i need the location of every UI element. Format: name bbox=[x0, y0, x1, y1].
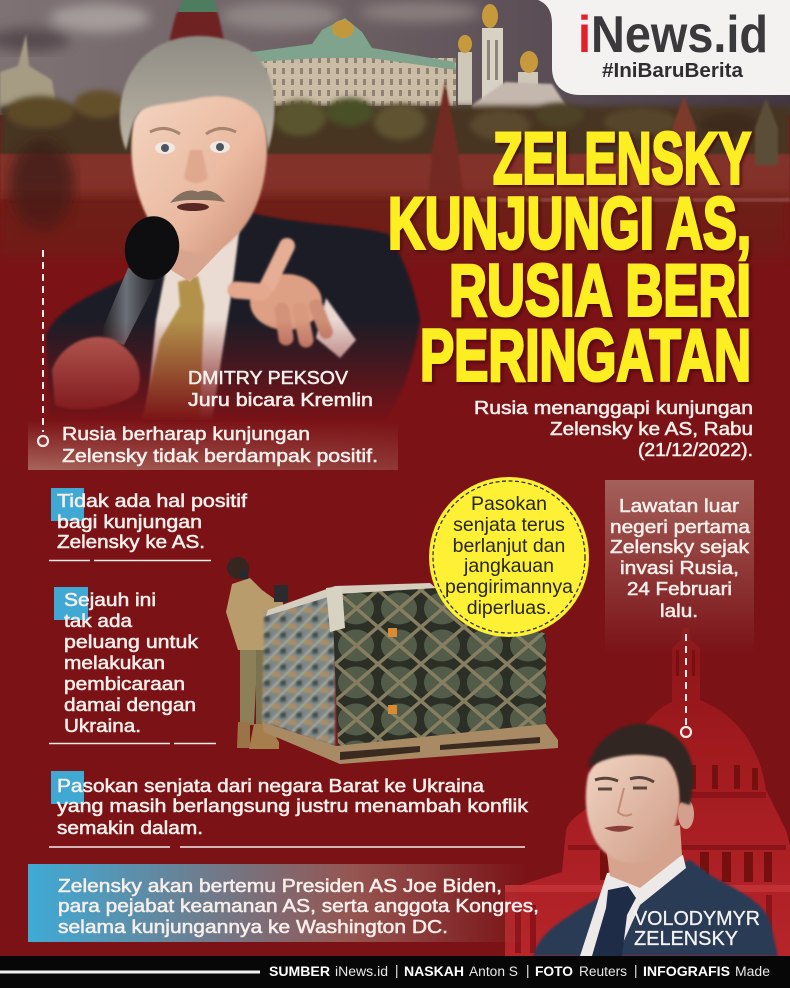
photo: Dmitry Peskov bbox=[30, 36, 430, 422]
panel: meeting info: para pejabat keamanan AS, serta anggota Kongres, bbox=[58, 895, 539, 916]
pointing hand bbox=[236, 246, 356, 358]
footer credits bbox=[0, 956, 790, 988]
tie bbox=[592, 886, 636, 956]
eyes and brows bbox=[595, 778, 654, 782]
footer credits: SUMBER bbox=[269, 964, 330, 979]
panel: Lawatan: lalu. bbox=[660, 600, 698, 621]
background photo: Kremlin bbox=[0, 0, 790, 300]
subtitle text: Rusia menanggapi kunjungan bbox=[474, 397, 753, 418]
shirt and collar bbox=[580, 855, 686, 956]
shirt bbox=[146, 225, 240, 420]
subtitle text bbox=[474, 397, 753, 460]
statement 2: pembicaraan bbox=[64, 673, 185, 694]
panel: Lawatan bbox=[605, 480, 754, 655]
dashed connector left bbox=[38, 250, 48, 446]
statement 2: Ukraina. bbox=[64, 715, 141, 736]
panel: Lawatan: Zelensky sejak bbox=[610, 536, 750, 557]
callout: yellow circle: senjata terus bbox=[453, 514, 565, 536]
panel: Rusia berharap: Rusia berharap kunjungan bbox=[62, 423, 310, 444]
name label: VOLODYMYR bbox=[634, 908, 760, 930]
bottom fade bbox=[30, 320, 430, 422]
soldier bbox=[226, 557, 288, 749]
footer credits: NASKAH bbox=[404, 964, 464, 979]
statement 2: Sejauh ini bbox=[64, 589, 156, 610]
subtitle text: Zelensky ke AS, Rabu bbox=[550, 418, 753, 439]
logo panel bbox=[538, 0, 790, 95]
mustache and mouth bbox=[170, 190, 225, 203]
footer credits: INFOGRAFIS bbox=[643, 964, 730, 979]
hair bbox=[120, 36, 275, 150]
grand palace bbox=[252, 58, 456, 106]
footer credits: Reuters bbox=[579, 964, 627, 979]
footer credits: | bbox=[634, 963, 638, 978]
photo: Volodymyr Zelensky bbox=[533, 724, 778, 956]
left palace bbox=[0, 34, 56, 108]
callout: yellow circle bbox=[429, 477, 589, 637]
title bbox=[388, 118, 751, 396]
footer credits: Made bbox=[735, 964, 770, 979]
neck bbox=[605, 825, 682, 888]
footer credits: | bbox=[395, 963, 399, 978]
orange labels bbox=[388, 628, 397, 637]
statement 2 bbox=[49, 587, 216, 744]
tower behind head bbox=[170, 0, 224, 60]
footer credits: FOTO bbox=[535, 964, 573, 979]
suit bbox=[46, 213, 420, 420]
photo: soldier and weapons pallet bbox=[226, 557, 558, 764]
footer credits: Anton S bbox=[469, 964, 518, 979]
callout: yellow circle: berlanjut dan bbox=[453, 535, 565, 557]
face bbox=[586, 747, 680, 863]
statement 2: peluang untuk bbox=[64, 631, 199, 652]
microphone head bbox=[119, 211, 185, 285]
panel: meeting info bbox=[28, 864, 539, 942]
holding hand bbox=[52, 337, 140, 409]
footer credits: | bbox=[526, 963, 530, 978]
nose shadow bbox=[618, 788, 632, 816]
statement 3: yang masih berlangsung justru menambah konflik bbox=[57, 795, 529, 816]
panel: Rusia berharap: Zelensky tidak berdampak positif. bbox=[62, 445, 378, 466]
hair bbox=[588, 724, 693, 805]
statement 2: melakukan bbox=[64, 652, 165, 673]
tie bbox=[142, 276, 204, 420]
ear bbox=[678, 799, 694, 829]
statement 3: semakin dalam. bbox=[57, 817, 203, 838]
dashed connector right bbox=[681, 634, 691, 737]
wooden base bbox=[262, 722, 558, 764]
pallet right face bbox=[332, 586, 546, 746]
callout: yellow circle: diperluas. bbox=[467, 597, 551, 619]
statement 1: Tidak ada hal positif bbox=[57, 490, 248, 511]
tree band bbox=[0, 106, 790, 166]
microphone handle bbox=[100, 268, 158, 345]
statement 2: damai dengan bbox=[64, 694, 196, 715]
statement 2: tak ada bbox=[64, 610, 133, 631]
pallet left face bbox=[262, 592, 335, 747]
name label: Peskov: DMITRY PEKSOV bbox=[188, 367, 349, 388]
neck and face bbox=[165, 232, 238, 282]
name label: Peskov: Juru bicara Kremlin bbox=[188, 389, 373, 410]
red wall and river bbox=[0, 154, 790, 200]
panel: Lawatan: Lawatan luar bbox=[619, 495, 739, 516]
panel: meeting info: selama kunjungannya ke Washington DC. bbox=[58, 916, 448, 937]
red fade bbox=[0, 175, 790, 300]
name label: ZELENSKY bbox=[634, 928, 738, 950]
panel: Lawatan: negeri pertama bbox=[610, 516, 751, 537]
panel: Rusia berharap bbox=[28, 420, 398, 470]
statement 3: Pasokan senjata dari negara Barat ke Ukraina bbox=[57, 775, 485, 796]
statement 1 bbox=[49, 488, 248, 560]
name label bbox=[634, 908, 760, 950]
mouth bbox=[604, 826, 634, 832]
pallet top wrap bbox=[266, 583, 436, 616]
subtitle text: (21/12/2022). bbox=[638, 439, 753, 460]
statement 3 bbox=[49, 771, 529, 847]
bell tower bbox=[482, 28, 503, 105]
eyes bbox=[155, 142, 175, 154]
statement 1: bagi kunjungan bbox=[57, 511, 202, 532]
logo tagline: #IniBaruBerita bbox=[602, 60, 744, 82]
suit bbox=[533, 860, 778, 956]
panel: meeting info: Zelensky akan bertemu Presiden AS Joe Biden, bbox=[58, 875, 502, 896]
footer credits: iNews.id bbox=[335, 964, 388, 979]
panel: Lawatan: 24 Februari bbox=[627, 578, 732, 599]
logo wordmark: iNews.id bbox=[578, 6, 768, 64]
callout: yellow circle: Pasokan bbox=[471, 493, 547, 515]
callout: yellow circle: pengirimannya bbox=[445, 576, 573, 598]
statement 1: Zelensky ke AS. bbox=[57, 531, 205, 552]
illustration: US Capitol bbox=[505, 628, 790, 956]
name label: Peskov bbox=[188, 367, 373, 410]
wall towers bbox=[428, 82, 464, 200]
callout: yellow circle: jangkauan bbox=[463, 555, 554, 577]
panel: Lawatan: invasi Rusia, bbox=[620, 557, 739, 578]
